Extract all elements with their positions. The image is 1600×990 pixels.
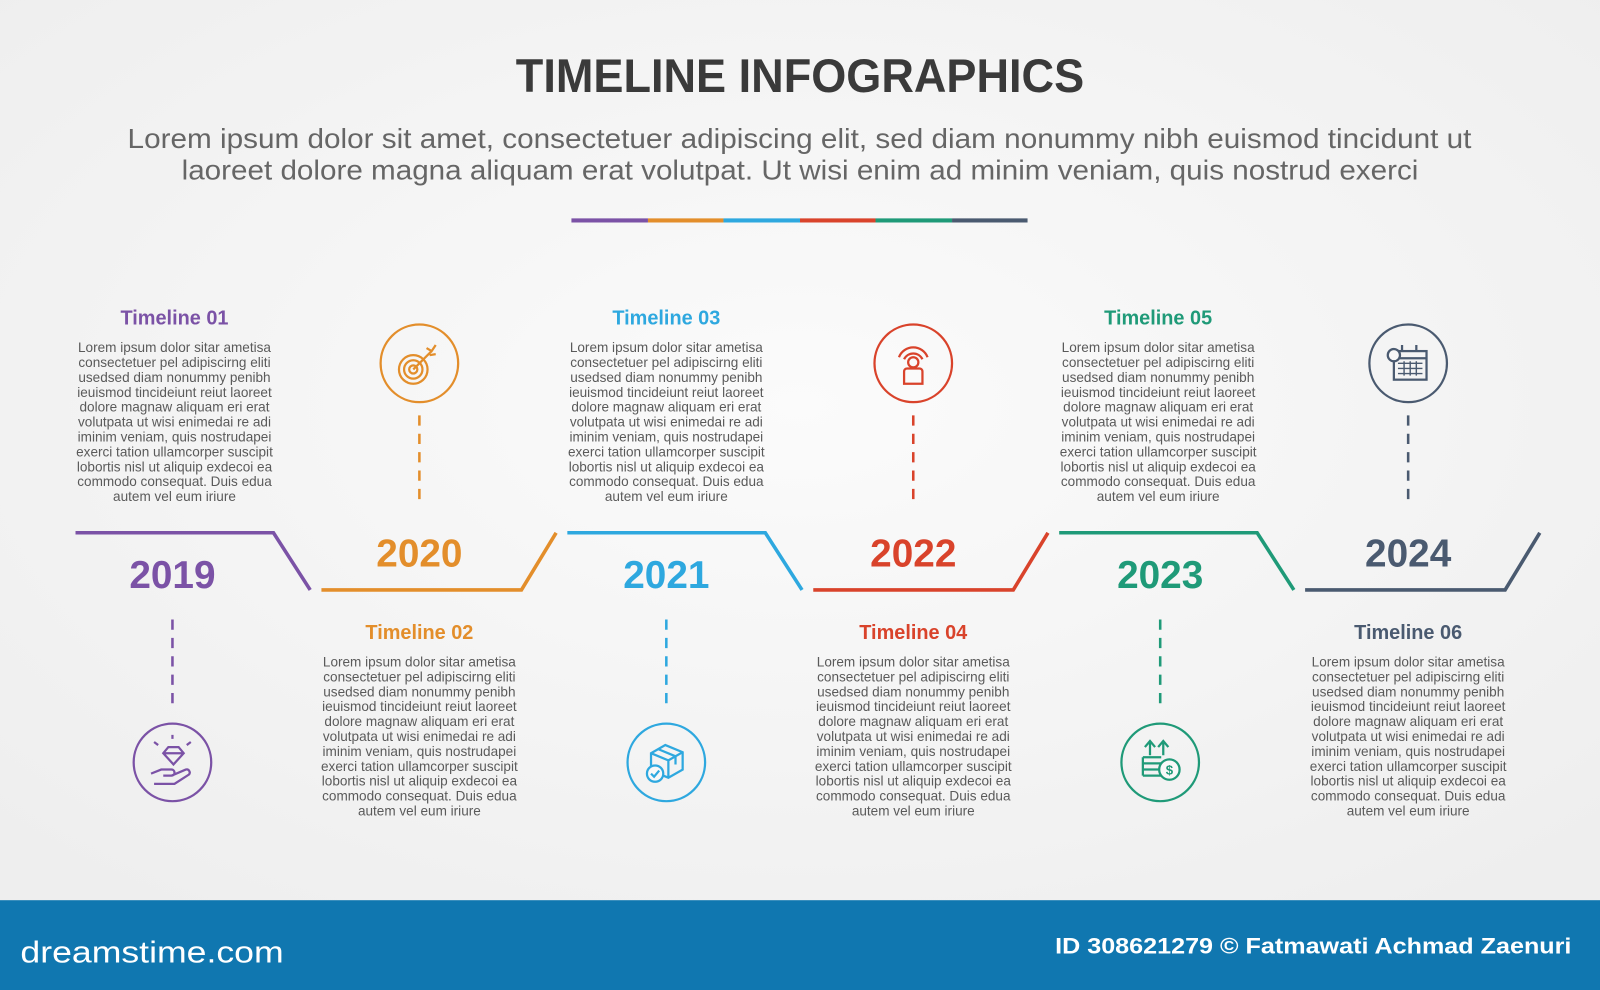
text block: commodo consequat. Duis edua xyxy=(1061,474,1256,489)
text block: commodo consequat. Duis edua xyxy=(322,789,517,804)
color bar xyxy=(571,218,1028,222)
subtitle: Lorem ipsum dolor sit amet, consectetuer adipiscing elit, sed diam nonummy nibh euismod tincidunt ut xyxy=(128,123,1472,154)
text block: exerci tation ullamcorper suscipit xyxy=(815,759,1012,774)
text block: usedsed diam nonummy penibh xyxy=(323,684,516,699)
text block: autem vel eum iriure xyxy=(358,803,481,818)
text block: dolore magnaw aliquam eri erat xyxy=(571,400,762,415)
subtitle xyxy=(128,123,1472,186)
text block: autem vel eum iriure xyxy=(1097,489,1220,504)
heading: Timeline 04 xyxy=(859,622,967,644)
text block: exerci tation ullamcorper suscipit xyxy=(321,759,518,774)
text block: autem vel eum iriure xyxy=(605,489,728,504)
dashed connector xyxy=(171,620,174,711)
text block: Lorem ipsum dolor sitar ametisa xyxy=(323,654,516,669)
icon: target xyxy=(381,325,458,402)
year: 2022 xyxy=(870,532,956,575)
text block: ieuismod tincideiunt reiut laoreet xyxy=(1311,699,1506,714)
text block: consectetuer pel adipiscirng eliti xyxy=(78,355,271,370)
text block: autem vel eum iriure xyxy=(852,803,975,818)
step 6: 2024 xyxy=(1305,325,1540,818)
footer logo: dreamstime.com xyxy=(20,935,284,969)
icon: person broadcast xyxy=(874,325,952,402)
heading: Timeline 02 xyxy=(365,622,473,644)
icon: calendar xyxy=(1369,325,1447,402)
text block: volutpata ut wisi enimedai re adi xyxy=(1062,415,1255,430)
text block: dolore magnaw aliquam eri erat xyxy=(1063,400,1253,415)
text block: autem vel eum iriure xyxy=(1347,803,1470,818)
footer bar xyxy=(0,900,1600,990)
text block: iminim veniam, quis nostrudapei xyxy=(569,430,763,445)
text block: commodo consequat. Duis edua xyxy=(77,474,272,489)
text block: iminim veniam, quis nostrudapei xyxy=(816,744,1010,759)
year: 2021 xyxy=(623,554,709,597)
text block: exerci tation ullamcorper suscipit xyxy=(1060,444,1257,459)
text block: exerci tation ullamcorper suscipit xyxy=(1310,759,1507,774)
timeline segment xyxy=(76,533,310,590)
icon: hand with diamond xyxy=(134,724,211,801)
dashed connector xyxy=(665,620,668,711)
timeline segment xyxy=(1305,533,1540,590)
heading: Timeline 01 xyxy=(121,308,228,330)
text block: consectetuer pel adipiscirng eliti xyxy=(1312,669,1504,684)
heading: Timeline 05 xyxy=(1104,308,1212,330)
text block: Lorem ipsum dolor sitar ametisa xyxy=(1312,654,1505,669)
text block: usedsed diam nonummy penibh xyxy=(1062,370,1254,385)
timeline segment xyxy=(321,533,556,590)
text block: consectetuer pel adipiscirng eliti xyxy=(817,669,1009,684)
text block: Lorem ipsum dolor sitar ametisa xyxy=(78,340,271,355)
text block: volutpata ut wisi enimedai re adi xyxy=(817,729,1010,744)
text block: ieuismod tincideiunt reiut laoreet xyxy=(322,699,517,714)
text block: Lorem ipsum dolor sitar ametisa xyxy=(1062,340,1255,355)
title: TIMELINE INFOGRAPHICS xyxy=(516,50,1084,102)
text block: lobortis nisl ut aliquip exdecoi ea xyxy=(1311,774,1506,789)
text block: lobortis nisl ut aliquip exdecoi ea xyxy=(77,459,273,474)
timeline segment xyxy=(813,533,1048,590)
text block: dolore magnaw aliquam eri erat xyxy=(1313,714,1503,729)
icon: box with check xyxy=(628,724,705,801)
step 2: 2020 xyxy=(321,325,556,818)
dashed connector xyxy=(1407,415,1409,507)
text block: volutpata ut wisi enimedai re adi xyxy=(78,415,271,430)
heading: Timeline 03 xyxy=(612,308,720,330)
year: 2020 xyxy=(376,532,463,575)
text block: dolore magnaw aliquam eri erat xyxy=(324,714,515,729)
text block: ieuismod tincideiunt reiut laoreet xyxy=(569,385,764,400)
text block: autem vel eum iriure xyxy=(113,489,236,504)
dashed connector xyxy=(418,415,421,507)
step 1: 2019 xyxy=(76,308,310,801)
timeline segment xyxy=(567,533,802,590)
dashed connector xyxy=(1159,620,1161,711)
text block: ieuismod tincideiunt reiut laoreet xyxy=(1061,385,1256,400)
text block: usedsed diam nonummy penibh xyxy=(570,370,762,385)
text block: usedsed diam nonummy penibh xyxy=(78,370,271,385)
text block: volutpata ut wisi enimedai re adi xyxy=(570,415,763,430)
timeline segment xyxy=(1059,533,1294,590)
text block: consectetuer pel adipiscirng eliti xyxy=(570,355,762,370)
text block: Lorem ipsum dolor sitar ametisa xyxy=(817,654,1010,669)
step 3: 2021 xyxy=(567,308,802,801)
heading: Timeline 06 xyxy=(1354,622,1462,644)
text block: lobortis nisl ut aliquip exdecoi ea xyxy=(1061,459,1256,474)
text block: exerci tation ullamcorper suscipit xyxy=(76,444,273,459)
text block: ieuismod tincideiunt reiut laoreet xyxy=(816,699,1011,714)
text block: dolore magnaw aliquam eri erat xyxy=(818,714,1008,729)
icon: coins up: $ xyxy=(1166,763,1174,778)
text block: iminim veniam, quis nostrudapei xyxy=(323,744,516,759)
step 4: 2022 xyxy=(813,325,1048,818)
text block: usedsed diam nonummy penibh xyxy=(1312,684,1504,699)
text block: usedsed diam nonummy penibh xyxy=(817,684,1009,699)
text block: exerci tation ullamcorper suscipit xyxy=(568,444,765,459)
text block: commodo consequat. Duis edua xyxy=(1311,789,1506,804)
text block: lobortis nisl ut aliquip exdecoi ea xyxy=(322,774,517,789)
text block: volutpata ut wisi enimedai re adi xyxy=(1312,729,1505,744)
text block: lobortis nisl ut aliquip exdecoi ea xyxy=(816,774,1011,789)
icon: coins up xyxy=(1121,724,1199,801)
text block: iminim veniam, quis nostrudapei xyxy=(1061,430,1255,445)
text block: consectetuer pel adipiscirng eliti xyxy=(1062,355,1254,370)
year: 2024 xyxy=(1365,532,1452,575)
year: 2023 xyxy=(1117,554,1203,597)
text block: consectetuer pel adipiscirng eliti xyxy=(323,669,516,684)
step 5: 2023 xyxy=(1059,308,1294,801)
text block: dolore magnaw aliquam eri erat xyxy=(80,400,270,415)
text block: commodo consequat. Duis edua xyxy=(569,474,764,489)
text block: lobortis nisl ut aliquip exdecoi ea xyxy=(569,459,764,474)
text block: ieuismod tincideiunt reiut laoreet xyxy=(77,385,272,400)
subtitle: laoreet dolore magna aliquam erat volutpat. Ut wisi enim ad minim veniam, quis nostrud exerci xyxy=(182,155,1418,186)
text block: commodo consequat. Duis edua xyxy=(816,789,1011,804)
text block: iminim veniam, quis nostrudapei xyxy=(78,430,271,445)
text block: iminim veniam, quis nostrudapei xyxy=(1311,744,1505,759)
text block: volutpata ut wisi enimedai re adi xyxy=(323,729,516,744)
footer credit: ID 308621279 © Fatmawati Achmad Zaenuri xyxy=(1055,933,1571,958)
text block: Lorem ipsum dolor sitar ametisa xyxy=(570,340,763,355)
dashed connector xyxy=(912,415,915,507)
year: 2019 xyxy=(129,554,216,597)
